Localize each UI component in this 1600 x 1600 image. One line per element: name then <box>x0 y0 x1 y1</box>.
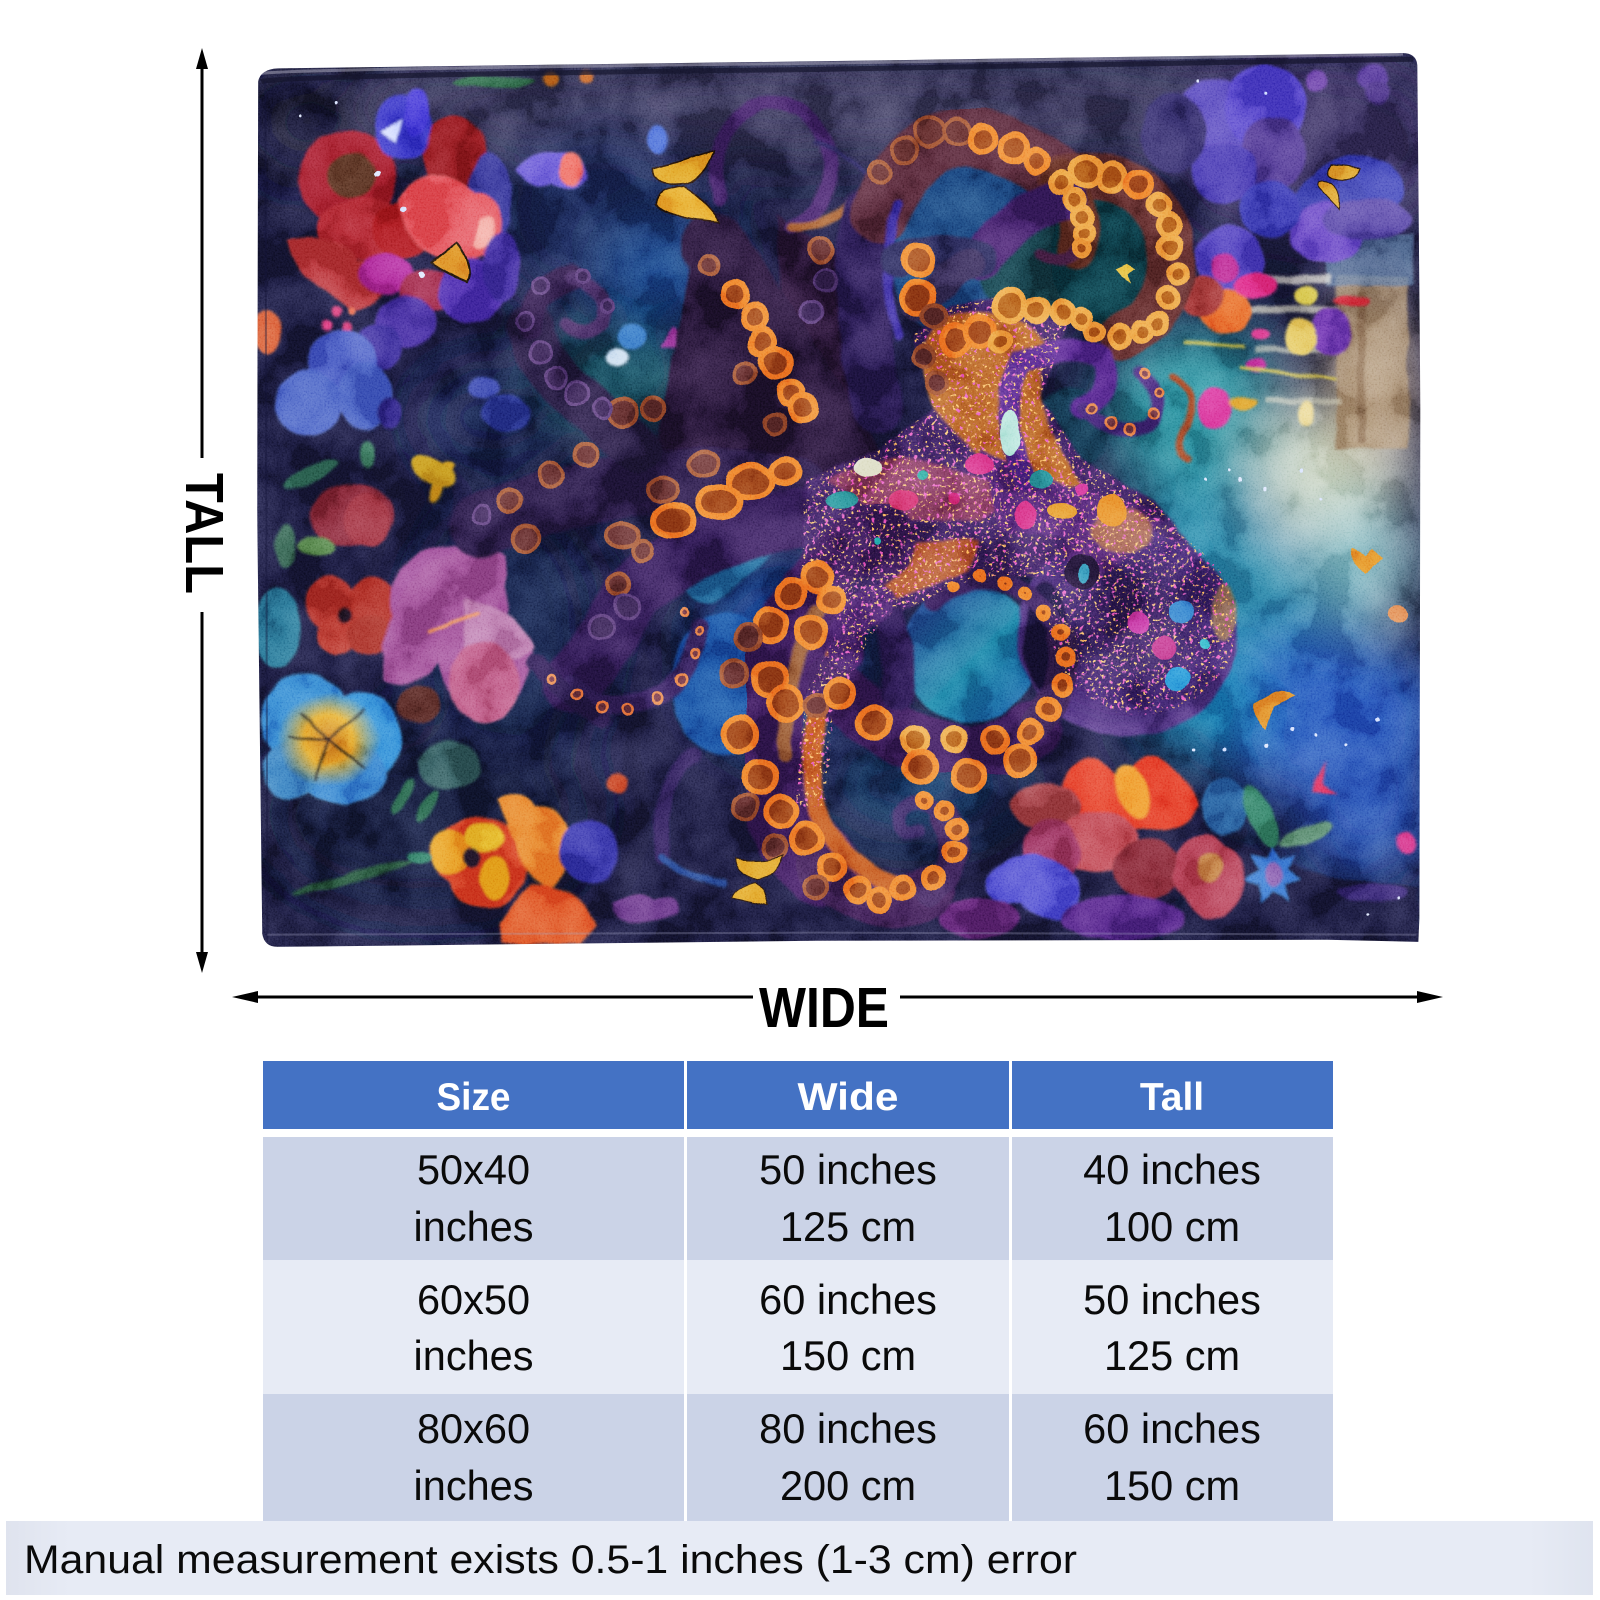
lower left arm <box>765 541 954 901</box>
butterfly: small peach <box>1389 606 1407 622</box>
butterfly: small yellow <box>1114 265 1135 284</box>
table row: 50x40: 40 inches <box>1083 1146 1261 1193</box>
dark rear arms and mantle shadow <box>480 102 878 883</box>
table row: 80x60: 80 inches <box>759 1405 937 1452</box>
butterfly: upper right <box>1319 165 1359 209</box>
table row: 50x40: 125 cm <box>780 1203 916 1250</box>
left flowers: red, pink and blue pansy <box>255 485 535 804</box>
label: WIDE: WIDE <box>759 976 889 1040</box>
table row: 80x60: 150 cm <box>1104 1462 1240 1509</box>
table row: 80x60: inches <box>414 1462 533 1509</box>
table row: 60x50: 60 inches <box>759 1276 937 1323</box>
bottom left orange flowers <box>292 773 679 944</box>
butterfly: large yellow <box>654 150 719 221</box>
measurement note bar <box>6 1521 1593 1595</box>
table row: 50x40: 100 cm <box>1104 1203 1240 1250</box>
colorful body sprinkles <box>826 411 1209 691</box>
table row: 80x60: 60 inches <box>1083 1405 1261 1452</box>
butterfly: right orange <box>1351 549 1383 573</box>
top right large arm <box>862 137 1171 408</box>
table header row: Size <box>436 1076 510 1119</box>
table row: 60x50: 50 inches <box>1083 1276 1261 1323</box>
top right violet flowers <box>1141 62 1412 429</box>
table header row <box>263 1061 1333 1129</box>
table row: 50x40: inches <box>414 1203 533 1250</box>
butterflies <box>431 150 1407 906</box>
bottom right flowers <box>939 757 1419 949</box>
table row: 80x60: 80x60 <box>417 1405 530 1452</box>
label: TALL: TALL <box>174 473 234 594</box>
table row: 50x40 <box>263 1137 1333 1260</box>
looping arm around the head <box>832 581 1063 755</box>
top and side hems <box>261 54 1416 939</box>
watercolor mottling overlay <box>245 41 1439 959</box>
watercolor background washes <box>245 51 1459 948</box>
mill-stripe texture at right <box>1235 235 1413 449</box>
top left red flower cluster <box>253 70 702 502</box>
head <box>1017 508 1238 737</box>
table row: 60x50: inches <box>414 1332 533 1379</box>
table row: 60x50: 125 cm <box>1104 1332 1240 1379</box>
size table <box>263 1061 1333 1522</box>
blanket artwork <box>245 41 1459 959</box>
fleece grain overlay <box>245 41 1439 959</box>
painted scene <box>245 41 1459 959</box>
table row: 50x40: 50 inches <box>759 1146 937 1193</box>
octopus eye <box>1063 554 1100 589</box>
table header row: Wide <box>798 1076 898 1119</box>
measurement note bar: Manual measurement exists 0.5-1 inches (1-3 cm) error <box>24 1538 1077 1582</box>
blanket base <box>245 41 1439 959</box>
table row: 50x40: 50x40 <box>417 1146 530 1193</box>
butterfly: bottom yellow <box>733 855 784 906</box>
thin right curl arm <box>1009 351 1192 480</box>
butterfly: lower orange <box>1253 691 1296 730</box>
arrow: wide dimension <box>232 991 1443 1003</box>
blue openings between the arms <box>671 148 1153 755</box>
arrow: tall dimension <box>196 48 208 973</box>
body glitter <box>796 298 1236 808</box>
octopus <box>472 102 1286 910</box>
table row: 80x60 <box>263 1394 1333 1522</box>
table header row: Tall <box>1140 1076 1204 1119</box>
table row: 60x50 <box>263 1260 1333 1394</box>
table row: 60x50: 150 cm <box>780 1332 916 1379</box>
orange suckers <box>472 117 1186 910</box>
octopus body with orange glow <box>801 296 1194 633</box>
white sparkles <box>299 80 1399 915</box>
table row: 80x60: 200 cm <box>780 1462 916 1509</box>
table row: 60x50: 60x50 <box>417 1276 530 1323</box>
butterfly: orange monarch <box>431 243 470 283</box>
